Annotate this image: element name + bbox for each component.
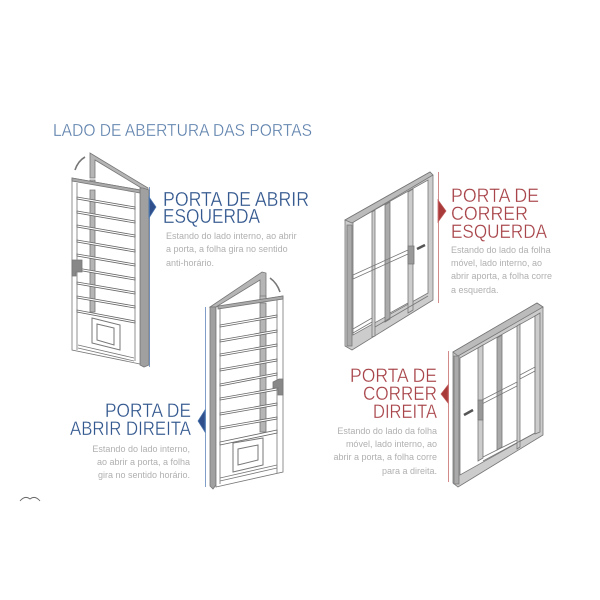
heading: porta de abrir esquerda: PORTA DE ABRIR bbox=[163, 189, 309, 211]
heading: porta de correr direita: PORTA DE bbox=[350, 366, 437, 387]
heading: porta de abrir esquerda: ESQUERDA bbox=[163, 206, 261, 228]
description: porta de correr esquerda: Estando do lado da folha bbox=[451, 245, 551, 255]
divider and pointer: sliding door left bbox=[438, 172, 446, 303]
description: porta de correr esquerda: a esquerda. bbox=[451, 285, 499, 295]
description: porta de abrir direita: Estando do lado interno, bbox=[92, 444, 190, 454]
heading: porta de abrir direita: ABRIR DIREITA bbox=[70, 419, 191, 440]
description: porta de correr direita: para a direita. bbox=[382, 466, 437, 476]
divider and pointer: left door bbox=[149, 187, 156, 367]
heading: porta de correr esquerda: CORRER bbox=[451, 204, 528, 225]
illustration: sliding door left bbox=[345, 172, 433, 350]
description: porta de abrir direita: ao abrir a porta, a folha bbox=[97, 457, 190, 467]
icon: opening arrow right door bbox=[270, 278, 280, 292]
description: porta de abrir esquerda: a porta, a folha gira no sentido bbox=[166, 244, 288, 254]
description: porta de correr direita: Estando do lado da folha bbox=[337, 426, 437, 436]
illustration: right-opening hinged door bbox=[210, 272, 283, 489]
heading: porta de correr esquerda: PORTA DE bbox=[451, 186, 539, 207]
description: porta de correr esquerda: abrir aporta, a folha corre bbox=[451, 271, 552, 281]
heading: porta de correr direita: CORRER bbox=[363, 384, 437, 405]
divider and pointer: sliding door right bbox=[441, 351, 448, 482]
illustration: sliding door right bbox=[453, 303, 543, 487]
heading: porta de abrir direita: PORTA DE bbox=[105, 401, 191, 422]
description: porta de abrir direita: gira no sentido horário. bbox=[98, 470, 190, 480]
page number fragment bbox=[20, 497, 40, 501]
description: porta de correr esquerda: móvel, lado interno, ao bbox=[451, 258, 542, 268]
heading: porta de correr esquerda: ESQUERDA bbox=[451, 222, 547, 243]
icon: opening arrow left door bbox=[75, 157, 85, 170]
description: porta de correr direita: abrir a porta, a folha corre bbox=[333, 452, 437, 462]
description: porta de abrir esquerda: anti-horário. bbox=[166, 258, 214, 268]
divider and pointer: right door bbox=[198, 307, 206, 487]
description: porta de correr direita: móvel, lado interno, ao bbox=[346, 439, 437, 449]
heading: porta de correr direita: DIREITA bbox=[373, 402, 437, 423]
description: porta de abrir esquerda: Estando do lado interno, ao abrir bbox=[166, 231, 297, 241]
illustration: left-opening hinged door bbox=[72, 153, 149, 367]
title: LADO DE ABERTURA DAS PORTAS bbox=[53, 120, 312, 140]
